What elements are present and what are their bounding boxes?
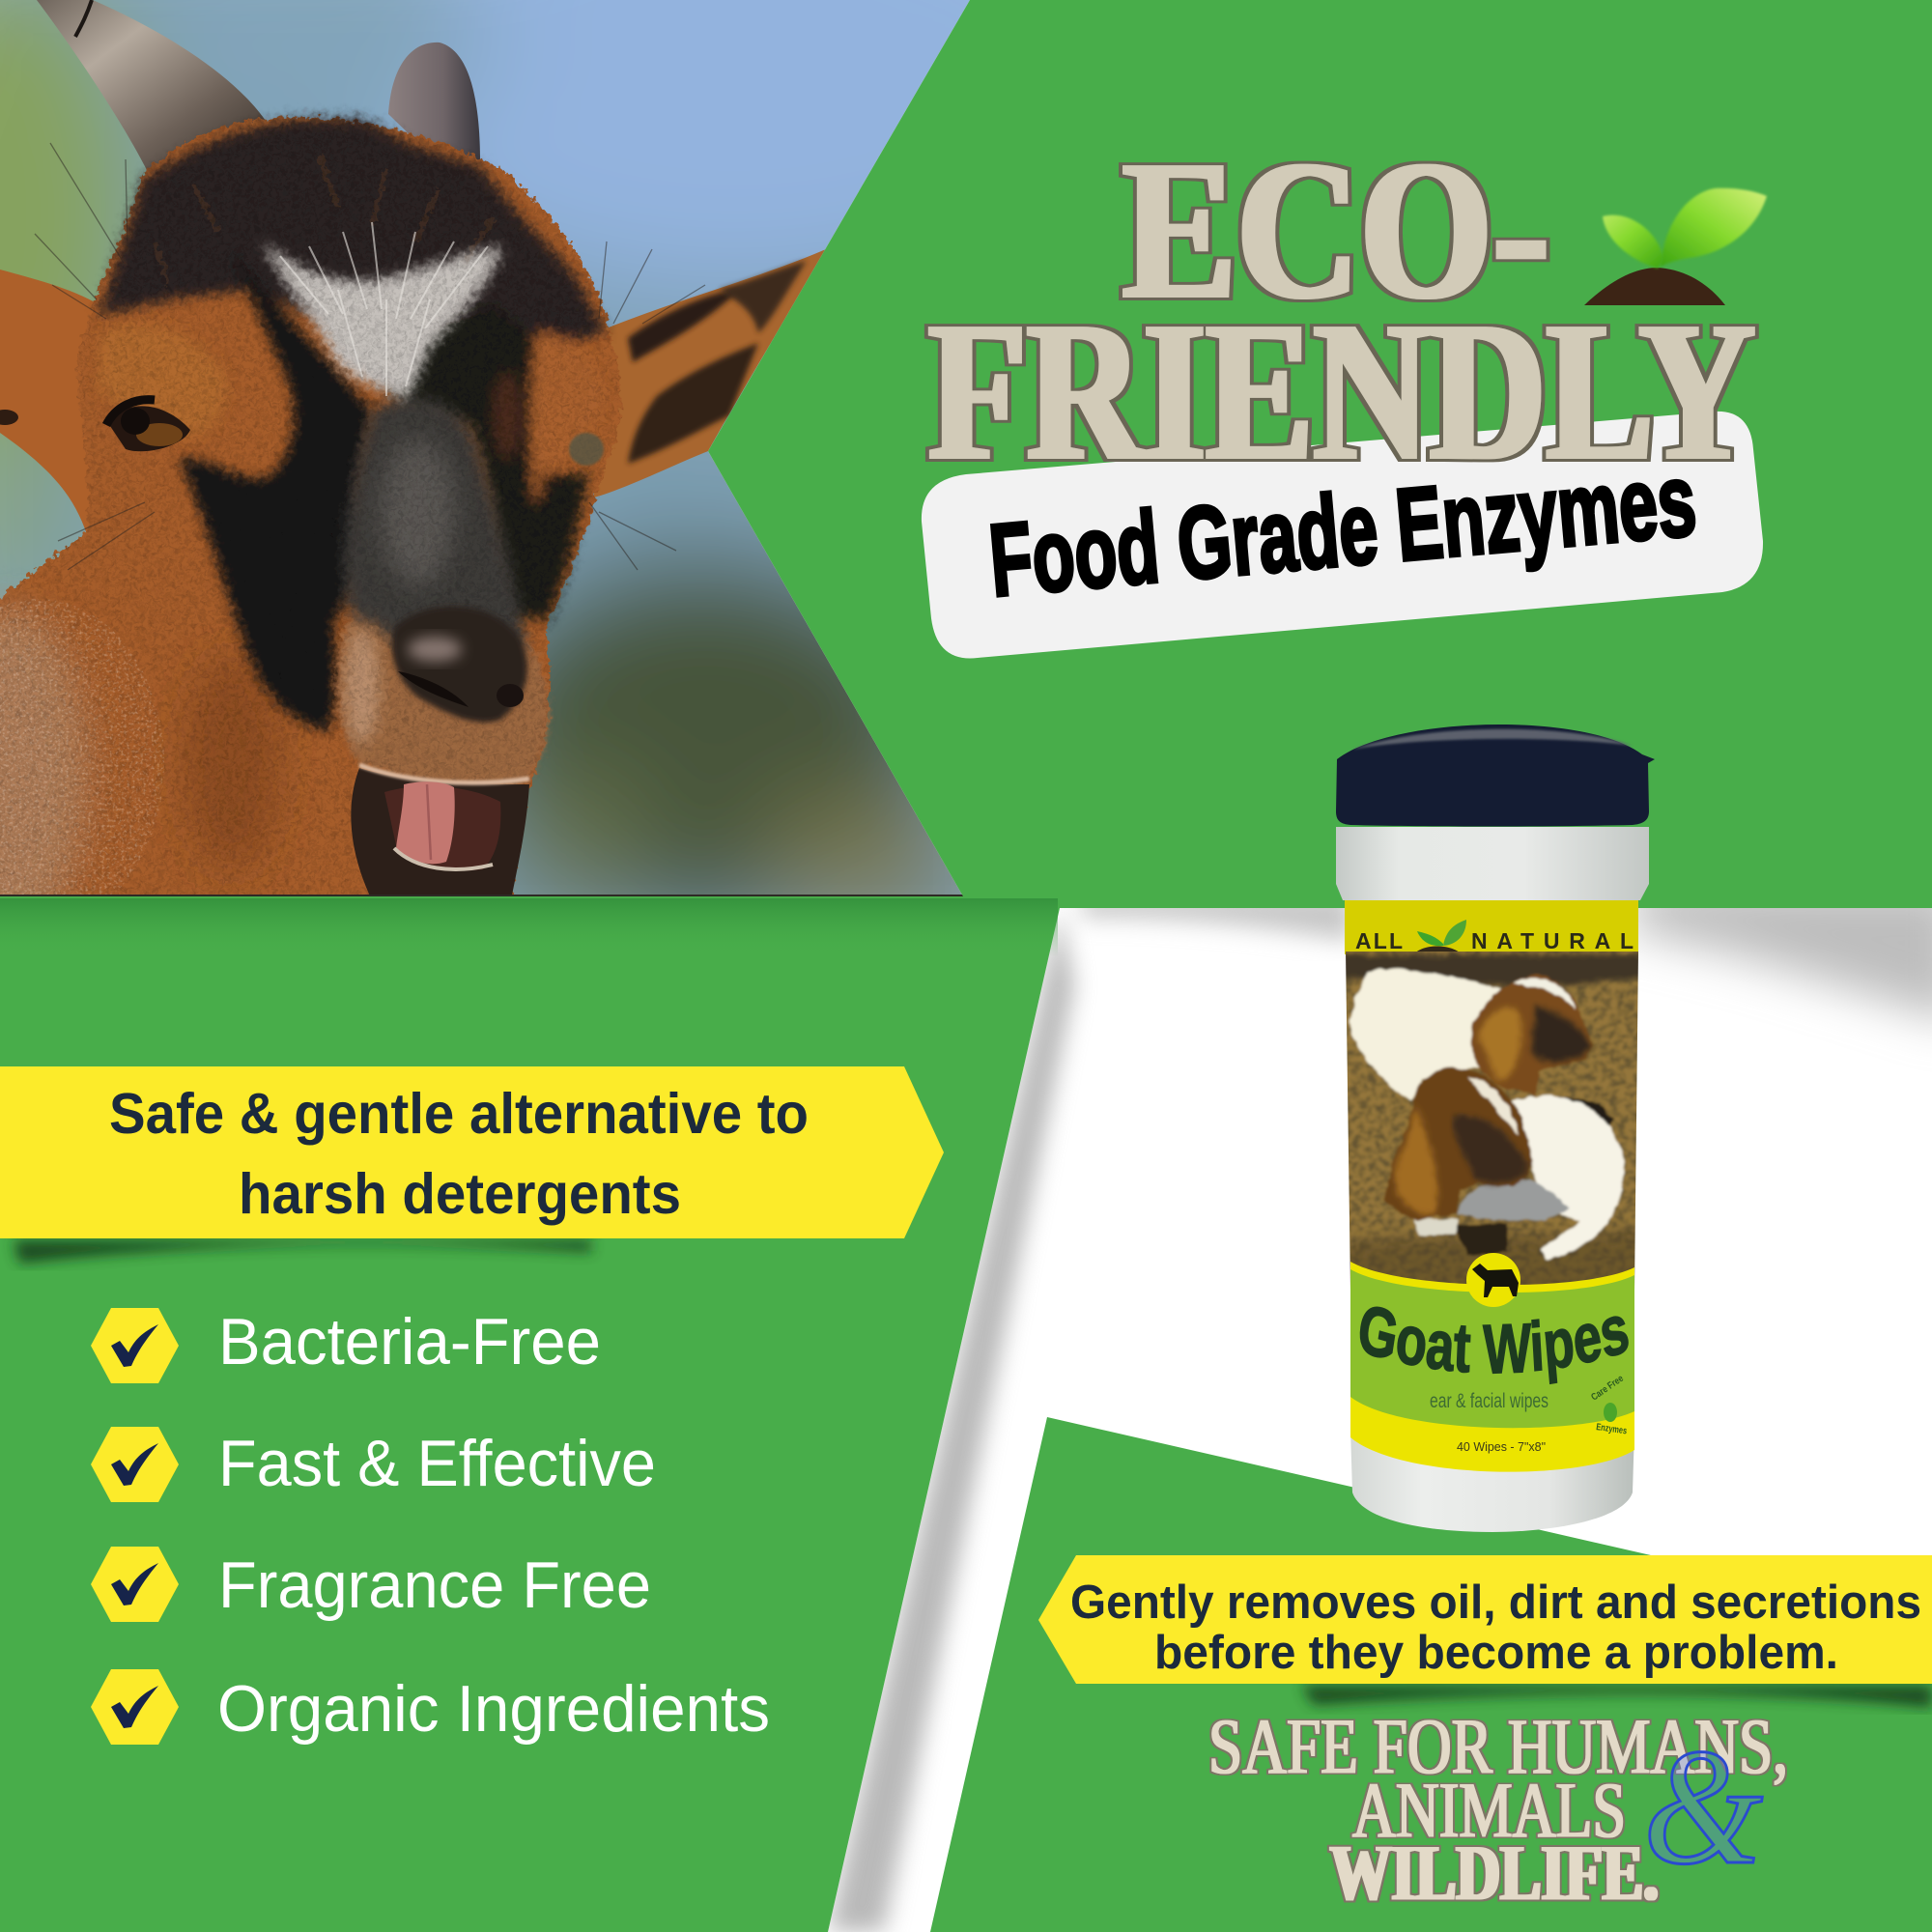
nose highlight [408,637,462,662]
nose [392,607,527,723]
muzzle light rim [345,628,380,744]
cap dome highlight [1352,729,1633,750]
wipes count: 40 Wipes - 7"x8" [1457,1439,1546,1454]
goat head and chest painting [0,117,621,937]
front goat head [1383,1067,1532,1220]
green label band [1350,1269,1634,1428]
back goat body [1350,969,1501,1101]
list item 3: Fragrance Free [218,1548,651,1622]
label text: all: ALL [1355,928,1403,953]
left ear [0,270,94,533]
mouth highlight rim [359,765,529,782]
goat silhouette [0,117,621,900]
blaze hair strokes [280,222,488,396]
photo base shadow line [0,895,966,897]
front goat dark legs [1454,1223,1507,1256]
slogan: safe for humans, animals and wildlife [1208,1702,1788,1917]
banner shadow [1301,1686,1932,1708]
background panel: bottom right green [930,1417,1932,1932]
tongue centre line [427,784,431,860]
small leaf [1603,215,1663,269]
back goat blaze [1512,978,1575,1009]
left eye [106,400,190,451]
soil mound [1584,268,1725,305]
background panel: lower left green [0,896,1060,1932]
mouth interior [384,786,500,870]
title line 2: FRIENDLY [928,280,1755,501]
care free enzymes mark [1589,1373,1628,1436]
title: eco-friendly [928,119,1755,501]
shadow under photo [0,898,1058,956]
straw texture [1338,942,1647,1299]
back goat head [1470,975,1594,1096]
care free enzymes mark: Care Free [1589,1373,1626,1403]
icon: check hexagon 3 [91,1547,179,1622]
tilted subtitle panel [922,412,1763,658]
banner shadow [14,1240,591,1264]
large leaf [1661,188,1767,267]
icon: check hexagon 1 [91,1308,179,1383]
list item 2: Fast & Effective [218,1427,656,1500]
dark ground below goats [1338,1227,1647,1299]
chest speckle highlights [0,599,164,927]
white forehead blaze [263,242,502,400]
icon: check hexagon 4 [91,1669,179,1745]
horn crack [75,0,92,37]
nose bridge [344,397,526,647]
panel shadows on white area [828,884,1932,1932]
chest speckled fur [0,609,87,937]
top yellow band [1345,900,1638,954]
list item 1: Bacteria-Free [218,1305,601,1378]
shaded chest stripe [184,657,280,869]
front goat body [1513,1095,1623,1261]
right ear [594,249,826,497]
banner text line 2: before they become a problem. [1154,1627,1838,1679]
banner text line 1: Gently removes oil, dirt and secretions [1070,1577,1921,1629]
teeth edge [394,848,493,869]
icon: sprout [1584,188,1767,305]
back goat face shading [1531,1005,1592,1063]
tongue [396,781,455,864]
label text: natural: NATURAL [1471,928,1634,953]
left ear inner spot [0,410,18,425]
canister cap [1336,724,1655,827]
product: goat wipes canister [1336,724,1655,1532]
slogan line 3: WILDLIFE. [1330,1829,1659,1917]
nostril right [497,684,524,707]
product descriptor: ear & facial wipes [1430,1390,1548,1412]
banner shape [1038,1555,1932,1684]
white collar [1336,827,1649,900]
slogan line 2: ANIMALS [1352,1766,1626,1854]
face colour masses [97,119,607,732]
right horn [388,43,480,162]
panel: safe and gentle banner [0,1066,944,1264]
banner shape [0,1066,944,1238]
front goat white foot [1414,1219,1457,1235]
front goat face shading [1454,1115,1528,1183]
subtitle pill [922,412,1763,658]
front goat grey chest [1457,1179,1569,1220]
front goat ear highlight [1395,1106,1437,1215]
straw ground [1338,942,1647,1299]
panel: gently removes banner [1038,1555,1932,1708]
label icon: leaf [1412,920,1466,956]
care free enzymes mark: Enzymes [1596,1422,1628,1436]
front goat blaze [1468,1077,1519,1135]
nostril left [398,671,469,707]
crown hair highlights [155,155,493,285]
list item 4: Organic Ingredients [217,1672,770,1746]
banner text line 2: harsh detergents [239,1162,681,1226]
left horn [37,0,272,176]
bridge highlight [381,440,454,584]
whiskers and stray hairs [35,143,705,570]
lower lip and jaw [351,768,529,900]
photo: goat close-up [0,0,970,895]
muzzle [338,598,549,788]
goat badge [1466,1253,1520,1307]
banner text line 1: Safe & gentle alternative to [109,1082,809,1146]
product name: Goat Wipes [1360,1306,1629,1385]
background panel: top right green with chevron [708,0,1932,908]
icon: check hexagon 2 [91,1427,179,1502]
ampersand: & [1643,1716,1763,1899]
back goat dark leg [1557,1096,1616,1132]
canister base [1350,1430,1634,1532]
yellow label stripe [1350,1262,1634,1472]
dark background strip [1338,954,1647,987]
fur texture overlay [0,117,621,900]
benefit list [91,1305,770,1746]
photo background: blurred sky and foliage [0,0,970,895]
title line 1: ECO- [1122,119,1549,340]
right eye [569,433,604,466]
back goat ear highlight [1478,1008,1521,1080]
label photo: two goat kids [1338,942,1647,1299]
